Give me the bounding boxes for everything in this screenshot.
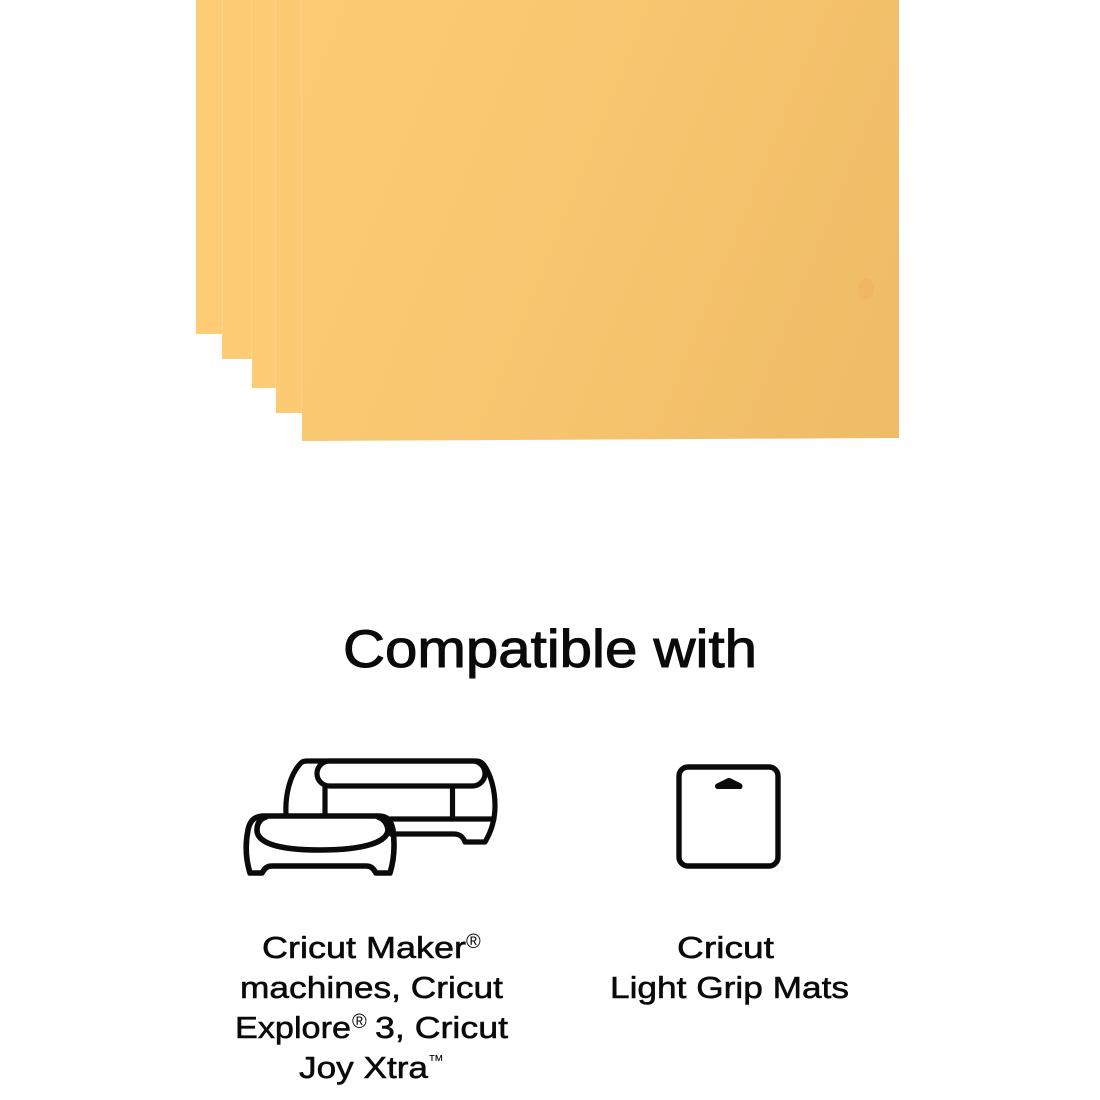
hanging hole — [715, 778, 742, 789]
sheet 5 — [302, 0, 899, 441]
text: mats: Light Grip Mats — [610, 970, 849, 1005]
text: machines list: 3, Cricut — [375, 1010, 508, 1045]
icon: cutting mat — [679, 767, 778, 866]
mat outline — [679, 767, 778, 866]
text: machines list: machines, Cricut — [240, 970, 503, 1005]
text: machines list: ® — [466, 931, 481, 953]
sheet 1 — [196, 0, 240, 334]
icon: cutting machines — [246, 761, 495, 873]
small machine — [246, 816, 394, 873]
sheet 2 — [222, 0, 270, 359]
text: machines list: ™ — [428, 1053, 444, 1070]
text: mats — [610, 930, 849, 1005]
text: machines list — [235, 930, 508, 1085]
large machine — [286, 761, 495, 842]
text: machines list: Cricut Maker — [262, 930, 466, 965]
heading: Compatible with — [343, 620, 757, 679]
image: stack of yellow vinyl sheets — [196, 0, 899, 441]
sheet 4 — [276, 0, 320, 413]
text: machines list: ® — [352, 1011, 367, 1033]
sheet edge highlights — [222, 0, 302, 413]
small orange mark on top sheet — [858, 278, 874, 300]
text: machines list: Joy Xtra — [299, 1050, 429, 1085]
text: mats: Cricut — [677, 930, 774, 965]
sheet 3 — [252, 0, 290, 388]
text: machines list: Explore — [235, 1010, 351, 1045]
